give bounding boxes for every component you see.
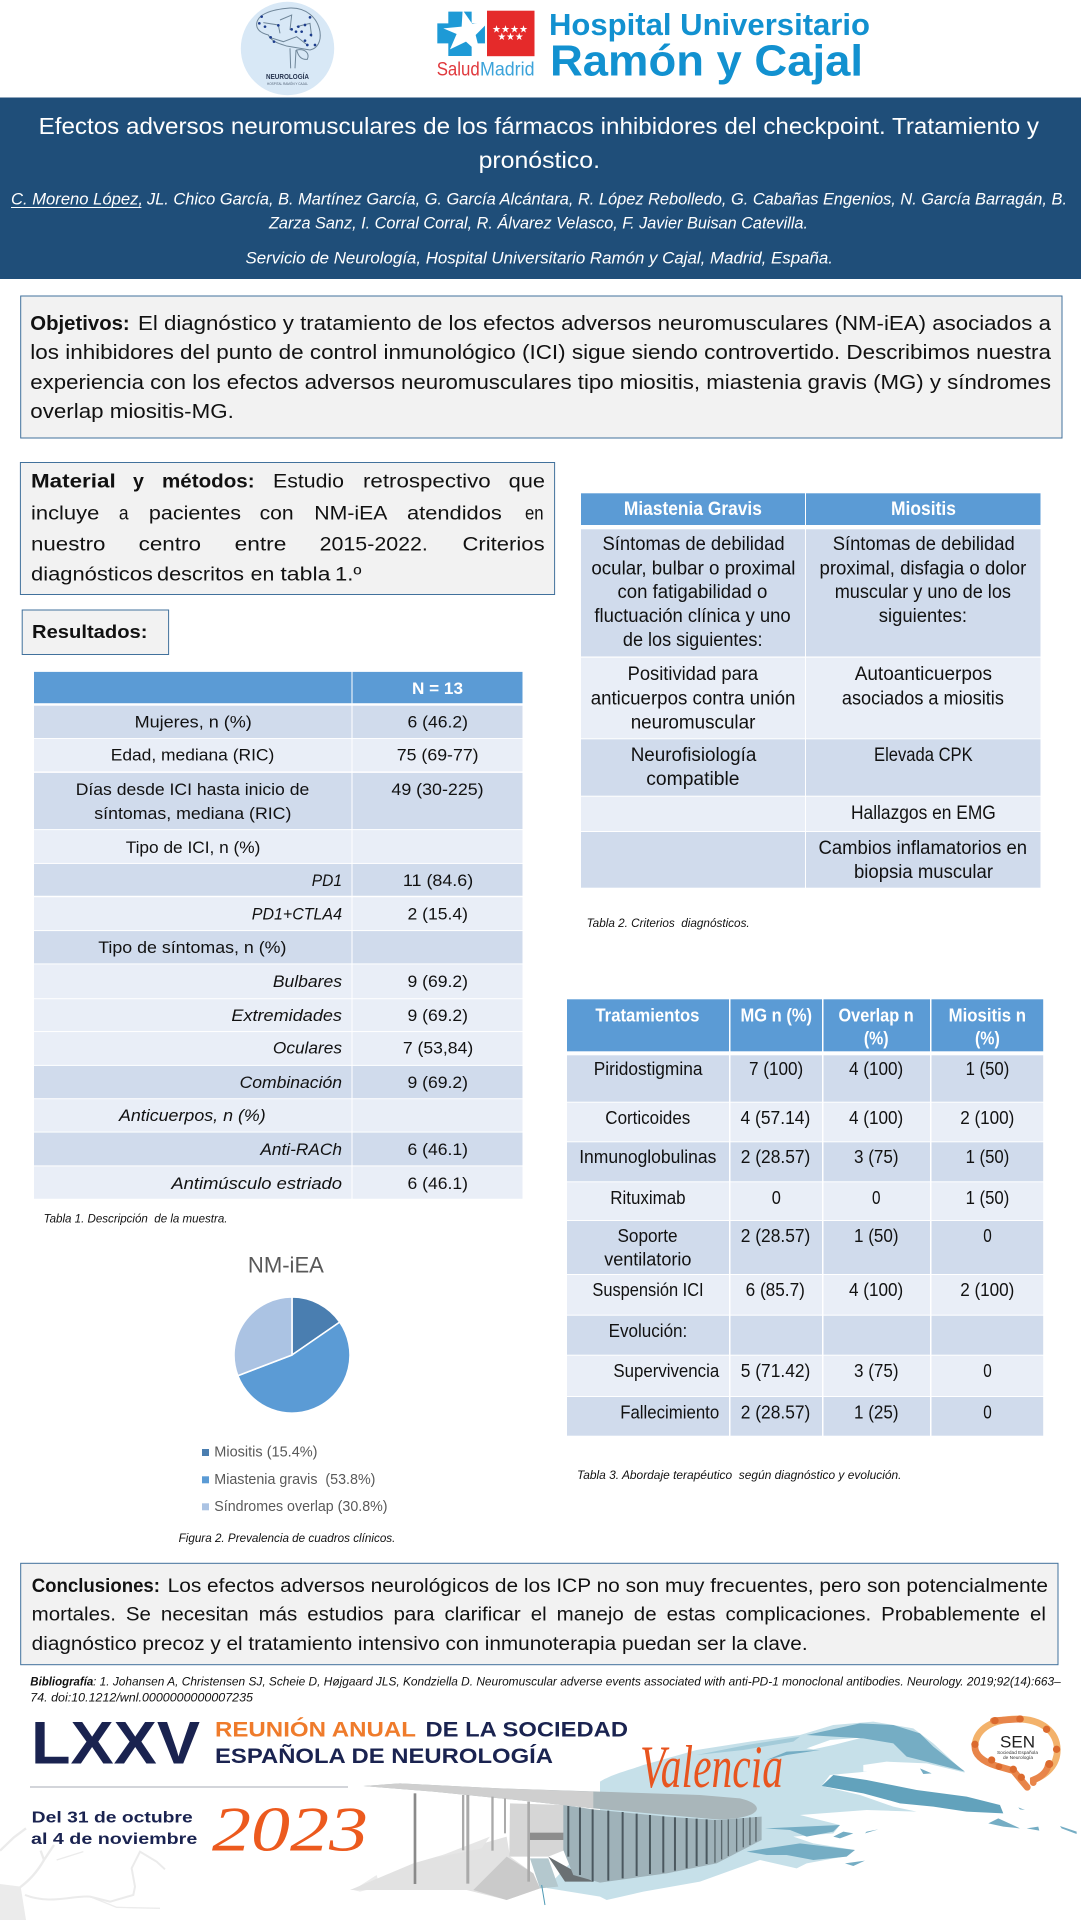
table 1: descripción de la muestra: 6 (46.1) bbox=[408, 1140, 468, 1159]
table 3: abordaje terapéutico: 3 (75) bbox=[854, 1147, 898, 1167]
table 1: descripción de la muestra: Combinación bbox=[240, 1073, 342, 1092]
table 3: abordaje terapéutico: 4 (100) bbox=[849, 1280, 903, 1300]
table 2: criterios diagnósticos: neuromuscular bbox=[631, 712, 756, 734]
pie chart: NM-iEA: NM-iEA bbox=[248, 1252, 324, 1278]
logo: SaludMadrid: Madrid bbox=[480, 60, 534, 80]
table 3: abordaje terapéutico: 2 (28.57) bbox=[741, 1402, 810, 1422]
footer banner: watercolour wash bbox=[547, 1722, 1077, 1900]
panel: objetivos: El diagnóstico y tratamiento de los efectos adversos neuromusculares (NM-iEA) asociados a bbox=[138, 313, 1052, 335]
table 1: descripción de la muestra bbox=[34, 672, 522, 1199]
caption: tabla 1: Tabla 1. Descripción de la muestra. bbox=[44, 1214, 227, 1226]
table 3: abordaje terapéutico: Fallecimiento bbox=[620, 1402, 719, 1422]
table 1: descripción de la muestra: Tipo de ICI, n (%) bbox=[126, 838, 260, 857]
panel: material y métodos: entre bbox=[235, 534, 286, 556]
panel: objetivos: los inhibidores del punto de control inmunológico (ICI) sigue siendo controvertido. Describimos nuestra bbox=[30, 342, 1052, 364]
table 2: criterios diagnósticos: Síntomas de debilidad bbox=[833, 534, 1015, 555]
pie chart: NM-iEA bbox=[202, 1252, 388, 1515]
table 3: abordaje terapéutico: Suspensión ICI bbox=[592, 1280, 704, 1300]
table 2: criterios diagnósticos: compatible bbox=[646, 769, 740, 790]
table 1: descripción de la muestra: Oculares bbox=[273, 1039, 343, 1057]
table 1: descripción de la muestra: síntomas, mediana (RIC) bbox=[94, 804, 291, 823]
table 3: abordaje terapéutico: 4 (100) bbox=[849, 1108, 903, 1128]
logo: SEN bbox=[971, 1715, 1060, 1787]
table 2: criterios diagnósticos: de los siguientes: bbox=[623, 630, 762, 651]
footer banner: title: REUNIÓN ANUAL bbox=[215, 1718, 416, 1742]
panel: material y métodos: Material bbox=[31, 472, 116, 492]
table 3: abordaje terapéutico bbox=[567, 999, 1043, 1436]
bibliography: Bibliografía bbox=[30, 1676, 94, 1688]
panel: material y métodos: NM-iEA bbox=[314, 504, 388, 524]
table 3: abordaje terapéutico: 2 (100) bbox=[960, 1280, 1014, 1300]
authors bbox=[11, 190, 1067, 232]
panel: material y métodos: retrospectivo bbox=[363, 472, 491, 492]
logo: Hospital Universitario Ramón y Cajal: Hospital Universitario bbox=[549, 7, 870, 42]
table 3: abordaje terapéutico: 1 (50) bbox=[966, 1188, 1009, 1208]
table 1: descripción de la muestra: Antimúsculo estriado bbox=[170, 1174, 342, 1193]
footer banner: dates bbox=[30, 1787, 368, 1864]
table 3: abordaje terapéutico: Corticoides bbox=[605, 1108, 690, 1128]
table 3: abordaje terapéutico: 2 (28.57) bbox=[741, 1226, 810, 1246]
logo: SaludMadrid: ★★★★ bbox=[492, 24, 528, 36]
panel: material y métodos: con bbox=[260, 504, 294, 524]
table 1: descripción de la muestra: Días desde ICI hasta inicio de bbox=[76, 780, 309, 799]
footer banner: building illustration bbox=[350, 1783, 762, 1905]
table 3: abordaje terapéutico: 0 bbox=[872, 1188, 880, 1208]
heading: resultados bbox=[22, 610, 169, 654]
panel: conclusiones: mortales. Se necesitan más estudios para clarificar el manejo de estas complicaciones. Probablemente el bbox=[32, 1604, 1046, 1626]
table 1: descripción de la muestra: Edad, mediana (RIC) bbox=[111, 745, 274, 764]
logo: neurología brain bbox=[241, 2, 334, 95]
logo: SaludMadrid: ★★★ bbox=[498, 32, 524, 43]
panel: objetivos: overlap miositis-MG. bbox=[30, 401, 234, 423]
table 2: criterios diagnósticos: Cambios inflamatorios en bbox=[818, 838, 1027, 859]
footer banner: title bbox=[31, 1710, 628, 1776]
panel: material y métodos: incluye bbox=[31, 504, 99, 524]
title: pronóstico. bbox=[479, 147, 600, 173]
table 2: criterios diagnósticos: fluctuación clínica y uno bbox=[594, 606, 791, 627]
authors: Zarza Sanz, I. Corral Corral, R. Álvarez Velasco, F. Javier Buisan Catevilla. bbox=[268, 214, 808, 232]
table 1: descripción de la muestra: Extremidades bbox=[231, 1006, 343, 1025]
logo: neurología brain: NEUROLOGÍA bbox=[266, 72, 309, 81]
panel: material y métodos: Estudio bbox=[273, 472, 344, 492]
footer banner: title: ESPAÑOLA DE NEUROLOGÍA bbox=[215, 1745, 553, 1768]
table 1: descripción de la muestra: Anticuerpos, n (%) bbox=[118, 1106, 266, 1125]
table 3: abordaje terapéutico: (%) bbox=[975, 1029, 1000, 1049]
table 3: abordaje terapéutico: 4 (100) bbox=[849, 1059, 903, 1079]
panel: material y métodos bbox=[20, 462, 555, 594]
table 1: descripción de la muestra: Mujeres, n (%) bbox=[135, 713, 252, 732]
table 2: criterios diagnósticos: biopsia muscular bbox=[854, 862, 994, 883]
table 3: abordaje terapéutico: Overlap n bbox=[838, 1005, 914, 1025]
table 2: criterios diagnósticos bbox=[581, 493, 1040, 888]
table 3: abordaje terapéutico: Soporte bbox=[618, 1226, 678, 1246]
table 1: descripción de la muestra: Anti-RACh bbox=[259, 1140, 342, 1159]
table 3: abordaje terapéutico: Inmunoglobulinas bbox=[579, 1147, 716, 1167]
table 1: descripción de la muestra: 6 (46.2) bbox=[408, 713, 468, 732]
table 3: abordaje terapéutico: Supervivencia bbox=[613, 1361, 720, 1381]
table 1: descripción de la muestra: Tipo de síntomas, n (%) bbox=[98, 938, 286, 957]
table 3: abordaje terapéutico: Tratamientos bbox=[595, 1005, 700, 1025]
table 3: abordaje terapéutico: ventilatorio bbox=[604, 1249, 691, 1269]
bibliography: 74. doi:10.1212/wnl.0000000000007235 bbox=[30, 1692, 254, 1704]
table 1: descripción de la muestra: 9 (69.2) bbox=[408, 1073, 468, 1092]
table 2: criterios diagnósticos: asociados a miositis bbox=[842, 688, 1004, 710]
logo: SaludMadrid: Salud bbox=[437, 60, 480, 80]
panel: material y métodos: descritos bbox=[157, 564, 244, 586]
table 2: criterios diagnósticos: Elevada CPK bbox=[874, 745, 973, 766]
table 3: abordaje terapéutico: 1 (50) bbox=[966, 1059, 1009, 1079]
table 3: abordaje terapéutico: 1 (50) bbox=[966, 1147, 1009, 1167]
legend bbox=[202, 1445, 388, 1515]
table 3: abordaje terapéutico: 3 (75) bbox=[854, 1361, 898, 1381]
table 2: criterios diagnósticos: con fatigabilidad o bbox=[618, 582, 767, 603]
caption: tabla 2: Tabla 2. Criterios diagnósticos. bbox=[587, 918, 750, 930]
panel: material y métodos: que bbox=[509, 472, 545, 492]
table 1: descripción de la muestra: 11 (84.6) bbox=[403, 871, 473, 890]
table 1: descripción de la muestra: 9 (69.2) bbox=[408, 972, 468, 991]
table 3: abordaje terapéutico: Evolución: bbox=[609, 1321, 687, 1341]
panel: conclusiones: Conclusiones: bbox=[32, 1576, 160, 1597]
panel: conclusiones: diagnóstico precoz y el tratamiento intensivo con inmunoterapia puedan ser la clave. bbox=[32, 1634, 808, 1655]
table 1: descripción de la muestra: PD1+CTLA4 bbox=[252, 905, 342, 924]
table 3: abordaje terapéutico: Rituximab bbox=[610, 1188, 686, 1208]
panel: material y métodos: atendidos bbox=[407, 504, 502, 524]
panel: material y métodos: a bbox=[119, 504, 129, 524]
title: Efectos adversos neuromusculares de los fármacos inhibidores del checkpoint. Tratamiento y bbox=[39, 113, 1039, 139]
table 3: abordaje terapéutico: (%) bbox=[864, 1029, 889, 1049]
table 3: abordaje terapéutico: 6 (85.7) bbox=[746, 1280, 805, 1300]
table 3: abordaje terapéutico: 0 bbox=[983, 1361, 992, 1381]
panel: material y métodos: en bbox=[251, 564, 274, 586]
panel: material y métodos: pacientes bbox=[149, 504, 241, 524]
table 3: abordaje terapéutico: 4 (57.14) bbox=[740, 1108, 810, 1128]
table 3: abordaje terapéutico: 2 (28.57) bbox=[741, 1147, 810, 1167]
panel: material y métodos: 2015-2022. bbox=[320, 534, 428, 556]
table 2: criterios diagnósticos: Miastenia Gravis bbox=[624, 499, 762, 520]
table 1: descripción de la muestra: 75 (69-77) bbox=[397, 745, 479, 764]
logo: Hospital Universitario Ramón y Cajal: Ramón y Cajal bbox=[550, 36, 863, 86]
table 3: abordaje terapéutico: 1 (50) bbox=[854, 1226, 898, 1246]
table 3: abordaje terapéutico: 0 bbox=[772, 1188, 781, 1208]
table 3: abordaje terapéutico: 0 bbox=[983, 1402, 992, 1422]
logo: Hospital Universitario Ramón y Cajal bbox=[549, 7, 870, 86]
table 1: descripción de la muestra: 6 (46.1) bbox=[408, 1174, 468, 1193]
table 3: abordaje terapéutico: 2 (100) bbox=[960, 1108, 1014, 1128]
table 3: abordaje terapéutico: 0 bbox=[983, 1226, 992, 1246]
legend: Síndromes overlap (30.8%) bbox=[214, 1499, 388, 1515]
panel: material y métodos: diagnósticos bbox=[31, 564, 153, 586]
panel: material y métodos: métodos: bbox=[162, 472, 255, 492]
table 2: criterios diagnósticos: muscular y uno de los bbox=[835, 582, 1011, 603]
footer banner: dates: al 4 de noviembre bbox=[31, 1831, 197, 1848]
table 3: abordaje terapéutico: MG n (%) bbox=[740, 1005, 812, 1025]
panel: material y métodos: tabla bbox=[280, 564, 331, 586]
panel: material y métodos: Criterios bbox=[462, 534, 545, 556]
table 3: abordaje terapéutico: Piridostigmina bbox=[594, 1059, 703, 1079]
table 2: criterios diagnósticos: Síntomas de debilidad bbox=[602, 534, 785, 555]
footer banner: title: DE LA SOCIEDAD bbox=[426, 1718, 628, 1742]
logo: SEN: Sociedad Española bbox=[997, 1750, 1039, 1755]
panel: objetivos: Objetivos: bbox=[30, 313, 130, 335]
table 2: criterios diagnósticos: Hallazgos en EMG bbox=[851, 803, 996, 824]
panel: material y métodos: centro bbox=[139, 534, 201, 556]
panel: material y métodos: 1.º bbox=[335, 564, 361, 586]
table 2: criterios diagnósticos: Positividad para bbox=[628, 664, 759, 685]
table 2: criterios diagnósticos: proximal, disfagia o dolor bbox=[820, 558, 1027, 580]
legend: Miositis (15.4%) bbox=[214, 1445, 318, 1461]
logo: SaludMadrid bbox=[437, 10, 534, 80]
table 3: abordaje terapéutico: 5 (71.42) bbox=[741, 1361, 810, 1381]
affiliation: Servicio de Neurología, Hospital Universitario Ramón y Cajal, Madrid, España. bbox=[246, 248, 833, 268]
legend: Miastenia gravis (53.8%) bbox=[214, 1472, 375, 1488]
title bbox=[39, 113, 1039, 173]
logo: neurología brain: HOSPITAL RAMÓN Y CAJAL bbox=[267, 81, 308, 86]
panel: material y métodos: y bbox=[133, 472, 144, 492]
bibliography bbox=[30, 1676, 1061, 1704]
caption: figura 2: Figura 2. Prevalencia de cuadros clínicos. bbox=[179, 1533, 395, 1545]
table 2: criterios diagnósticos: Miositis bbox=[891, 499, 956, 520]
table 2: criterios diagnósticos: anticuerpos contra unión bbox=[591, 688, 795, 710]
footer banner: dates: Del 31 de octubre bbox=[32, 1810, 193, 1826]
panel: material y métodos: en bbox=[525, 504, 544, 524]
table 3: abordaje terapéutico: 1 (25) bbox=[854, 1402, 898, 1422]
table 1: descripción de la muestra: 9 (69.2) bbox=[408, 1006, 468, 1025]
table 2: criterios diagnósticos: Autoanticuerpos bbox=[855, 664, 992, 685]
footer banner: dates: 2023 bbox=[212, 1794, 368, 1864]
table 2: criterios diagnósticos: Neurofisiología bbox=[631, 745, 757, 766]
authors: C. Moreno López, bbox=[11, 190, 143, 208]
table 1: descripción de la muestra: Bulbares bbox=[273, 972, 343, 991]
panel: conclusiones bbox=[21, 1563, 1058, 1665]
table 1: descripción de la muestra: 2 (15.4) bbox=[408, 905, 468, 924]
table 3: abordaje terapéutico: Miositis n bbox=[949, 1005, 1026, 1025]
panel: conclusiones: Los efectos adversos neurológicos de los ICP no son muy frecuentes, pero son potencialmente bbox=[168, 1576, 1048, 1597]
caption: tabla 3: Tabla 3. Abordaje terapéutico según diagnóstico y evolución. bbox=[577, 1470, 902, 1482]
header band bbox=[0, 98, 1081, 279]
panel: material y métodos: nuestro bbox=[31, 534, 105, 556]
footer banner: title: LXXV bbox=[31, 1710, 200, 1776]
footer banner: river map decoration bbox=[0, 1828, 380, 1920]
bibliography: : 1. Johansen A, Christensen SJ, Scheie D, Højgaard JLS, Kondziella D. Neuromuscular adverse events associated with anti-PD-1 monoclonal antibodies. Neurology. 2019;92(14):663– bbox=[93, 1676, 1061, 1688]
table 1: descripción de la muestra: 49 (30-225) bbox=[391, 780, 484, 799]
table 3: abordaje terapéutico: 7 (100) bbox=[749, 1059, 803, 1079]
logo: SEN: SEN bbox=[1000, 1732, 1035, 1752]
table 1: descripción de la muestra: PD1 bbox=[312, 871, 342, 890]
table 1: descripción de la muestra: N = 13 bbox=[412, 679, 463, 698]
table 1: descripción de la muestra: 7 (53,84) bbox=[403, 1039, 473, 1057]
table 2: criterios diagnósticos: siguientes: bbox=[879, 606, 967, 627]
logo: SEN: de Neurología bbox=[1003, 1755, 1034, 1760]
footer banner: Valencia lettering: Valencia bbox=[640, 1734, 783, 1800]
heading: resultados: Resultados: bbox=[32, 622, 148, 642]
authors: JL. Chico García, B. Martínez García, G. García Alcántara, R. López Rebolledo, G. Cabañas Engenios, N. García Barragán, B. bbox=[146, 190, 1067, 208]
table 2: criterios diagnósticos: ocular, bulbar o proximal bbox=[591, 558, 795, 580]
panel: objetivos: experiencia con los efectos adversos neuromusculares tipo miositis, miastenia gravis (MG) y síndromes bbox=[30, 372, 1051, 394]
panel: objetivos bbox=[21, 296, 1062, 438]
